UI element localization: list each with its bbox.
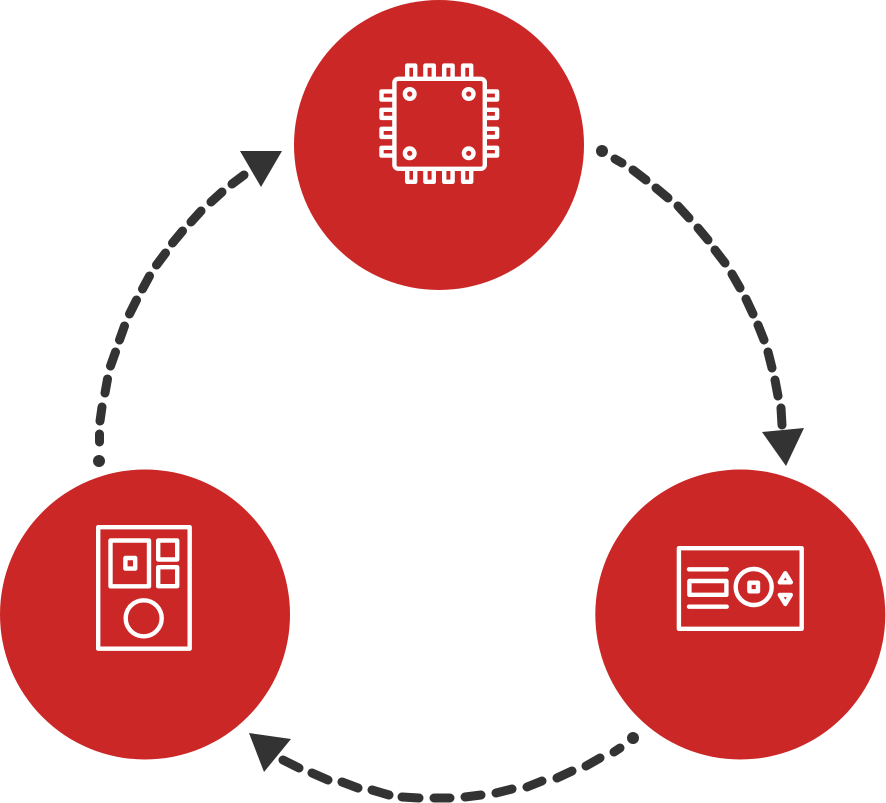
icon: device front panel [98, 527, 190, 649]
arrow: top to right [596, 145, 804, 466]
red circle: left [0, 470, 290, 760]
icon: microchip [382, 66, 497, 182]
panel: left circle with device [0, 470, 290, 760]
arrow: left to top [93, 151, 282, 467]
panel: right circle with controller [595, 470, 885, 760]
red circle: right [595, 470, 885, 760]
arrow: right to left [249, 732, 639, 798]
red circle: top [294, 0, 584, 290]
icon: control panel [679, 548, 802, 629]
panel: top circle with chip [294, 0, 584, 290]
